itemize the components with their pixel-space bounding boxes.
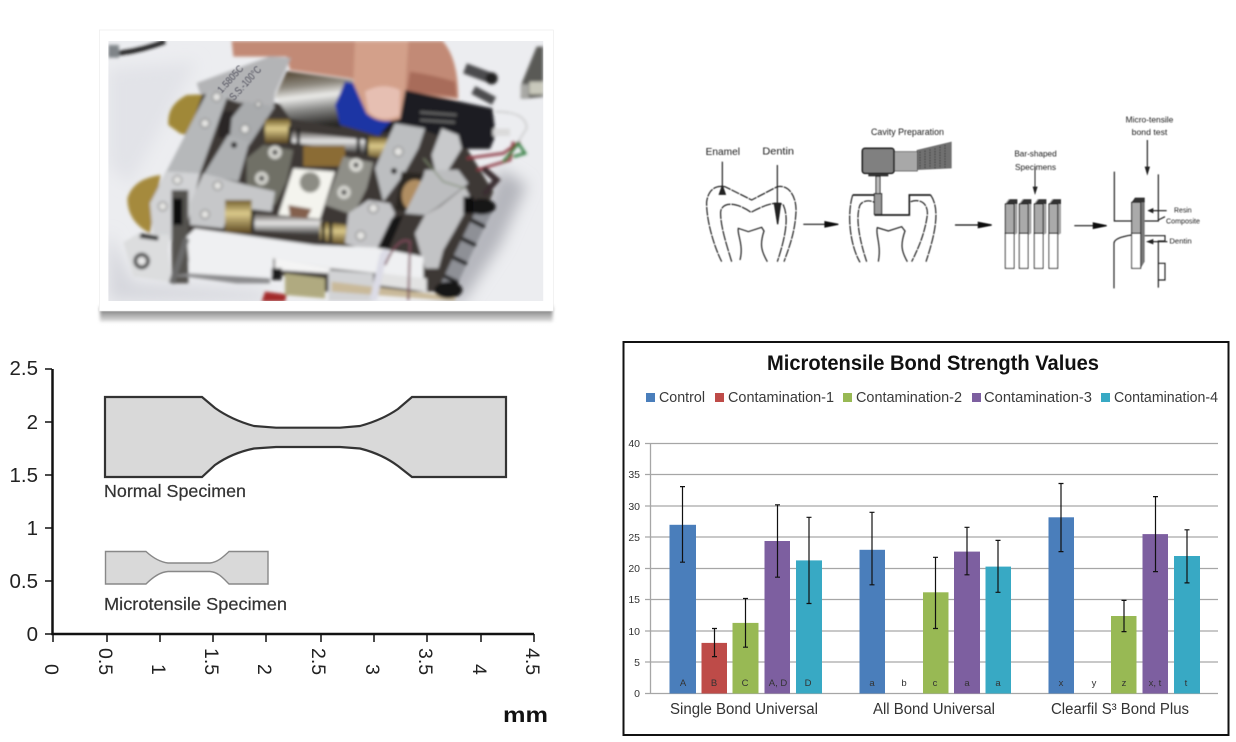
handwritten device marking: 1.5805C	[216, 64, 246, 96]
finger	[353, 41, 408, 121]
spiral tube	[445, 203, 488, 293]
panel: tooth specimen preparation diagram	[706, 115, 1200, 288]
category labels: Single Bond Universal	[670, 701, 818, 718]
significance letters: C	[742, 678, 749, 689]
y axis labels: 2.5	[10, 357, 38, 380]
gears	[168, 94, 203, 138]
normal specimen label: Normal Specimen	[104, 481, 246, 501]
unit label mm: mm	[503, 704, 548, 727]
significance letters: A	[680, 678, 687, 689]
diagram labels: Enamel	[706, 147, 740, 158]
significance letters	[680, 678, 1188, 689]
y axis values: 0	[634, 688, 640, 700]
background objects	[108, 42, 165, 54]
significance letters: A, D	[769, 678, 787, 689]
diagram labels	[706, 115, 1200, 245]
arrow: step 1 to 2	[803, 222, 838, 227]
legend: Contamination-2	[856, 390, 962, 406]
significance letters: D	[805, 678, 812, 689]
handwritten device marking	[217, 64, 262, 100]
diagram: tooth with enamel and dentin	[707, 162, 796, 262]
diagram: micro-tensile bond test	[1114, 140, 1167, 288]
dark underlay	[167, 92, 493, 292]
significance letters: t	[1185, 678, 1188, 689]
legend	[646, 390, 1218, 406]
y axis labels: 1.5	[10, 464, 38, 487]
y axis values: 15	[628, 594, 640, 606]
bottom pieces	[275, 258, 330, 273]
legend: Contamination-3	[984, 390, 1092, 406]
significance letters: z	[1122, 678, 1127, 689]
y axis values	[628, 438, 640, 700]
diagram labels: Specimens	[1015, 163, 1056, 172]
category labels: Clearfil S³ Bond Plus	[1051, 701, 1189, 718]
screws	[158, 93, 403, 240]
diagram: bar-shaped specimens	[1005, 167, 1061, 268]
diagram labels: Dentin	[762, 146, 794, 157]
y axis labels: 1	[27, 517, 38, 540]
lower rod	[225, 200, 252, 233]
diagram labels: Dentin	[1169, 238, 1192, 245]
x axis labels: 4	[468, 664, 490, 675]
bars: Single Bond Universal	[670, 525, 822, 694]
bars: All Bond Universal	[860, 550, 1011, 694]
top plate and bars	[197, 56, 291, 106]
y axis values: 10	[628, 626, 640, 638]
y axis values: 20	[628, 563, 640, 575]
wires	[373, 252, 388, 300]
legend: Contamination-1	[728, 390, 834, 406]
motor	[275, 71, 353, 128]
arrow: step 3 to 4	[1074, 223, 1107, 228]
significance letters: b	[901, 678, 907, 689]
significance letters: B	[711, 678, 717, 689]
y axis values: 25	[628, 532, 640, 544]
bars: Clearfil S3 Bond Plus	[1048, 517, 1200, 694]
diagram labels: Cavity Preparation	[871, 127, 944, 137]
diagram labels: Bar-shaped	[1014, 150, 1057, 159]
lower left plates	[190, 173, 275, 228]
handwritten device marking: S.S.-100°C	[227, 64, 264, 103]
diagram labels: bond test	[1132, 128, 1168, 137]
center	[303, 146, 345, 166]
legend: Contamination-4	[1114, 390, 1218, 406]
microtensile specimen shape	[106, 552, 268, 584]
category labels	[670, 701, 1189, 718]
hand	[232, 41, 458, 99]
upper rod	[265, 119, 290, 143]
normal specimen shape	[105, 397, 506, 477]
significance letters: y	[1092, 678, 1097, 689]
axes	[45, 369, 534, 642]
gridlines and axis	[645, 443, 1218, 694]
x axis labels: 3.5	[414, 648, 436, 675]
y axis labels: 0.5	[10, 570, 38, 593]
x axis labels: 1.5	[200, 648, 222, 675]
y axis labels	[10, 357, 38, 646]
y axis values: 40	[628, 438, 640, 450]
panel: microtensile bond strength bar chart	[624, 342, 1228, 735]
x axis labels: 3	[361, 664, 383, 675]
x axis labels: 2.5	[307, 648, 329, 675]
diagram labels: Composite	[1166, 218, 1200, 225]
significance letters: a	[995, 678, 1001, 689]
microtensile specimen label: Microtensile Specimen	[104, 594, 287, 614]
arrow: step 2 to 3	[955, 222, 992, 228]
category labels: All Bond Universal	[873, 701, 995, 718]
diagram labels: Micro-tensile	[1126, 115, 1174, 124]
chart title: Microtensile Bond Strength Values	[767, 352, 1099, 375]
panel: photo of microtensile testing device	[99, 30, 553, 322]
legend: Control	[659, 390, 705, 406]
x axis labels	[40, 648, 543, 675]
x axis labels: 0.5	[94, 648, 116, 675]
y axis values: 30	[628, 501, 640, 513]
y axis labels: 0	[27, 623, 38, 646]
y axis labels: 2	[27, 411, 38, 434]
error bars	[680, 484, 1190, 657]
significance letters: a	[869, 678, 875, 689]
x axis labels: 1	[147, 664, 169, 675]
significance letters: x, t	[1149, 678, 1162, 689]
significance letters: a	[964, 678, 970, 689]
right plates	[375, 123, 425, 202]
x axis labels: 4.5	[521, 648, 543, 675]
x axis labels: 0	[40, 664, 62, 675]
front bar and block	[187, 228, 423, 278]
diagram: cavity preparation with handpiece	[850, 142, 952, 262]
y axis values: 35	[628, 469, 640, 481]
x axis labels: 2	[253, 664, 275, 675]
significance letters: c	[933, 678, 938, 689]
significance letters: x	[1059, 678, 1064, 689]
panel: specimen size comparison chart	[10, 357, 548, 727]
diagram labels: Resin	[1174, 207, 1192, 214]
y axis values: 5	[634, 657, 640, 669]
